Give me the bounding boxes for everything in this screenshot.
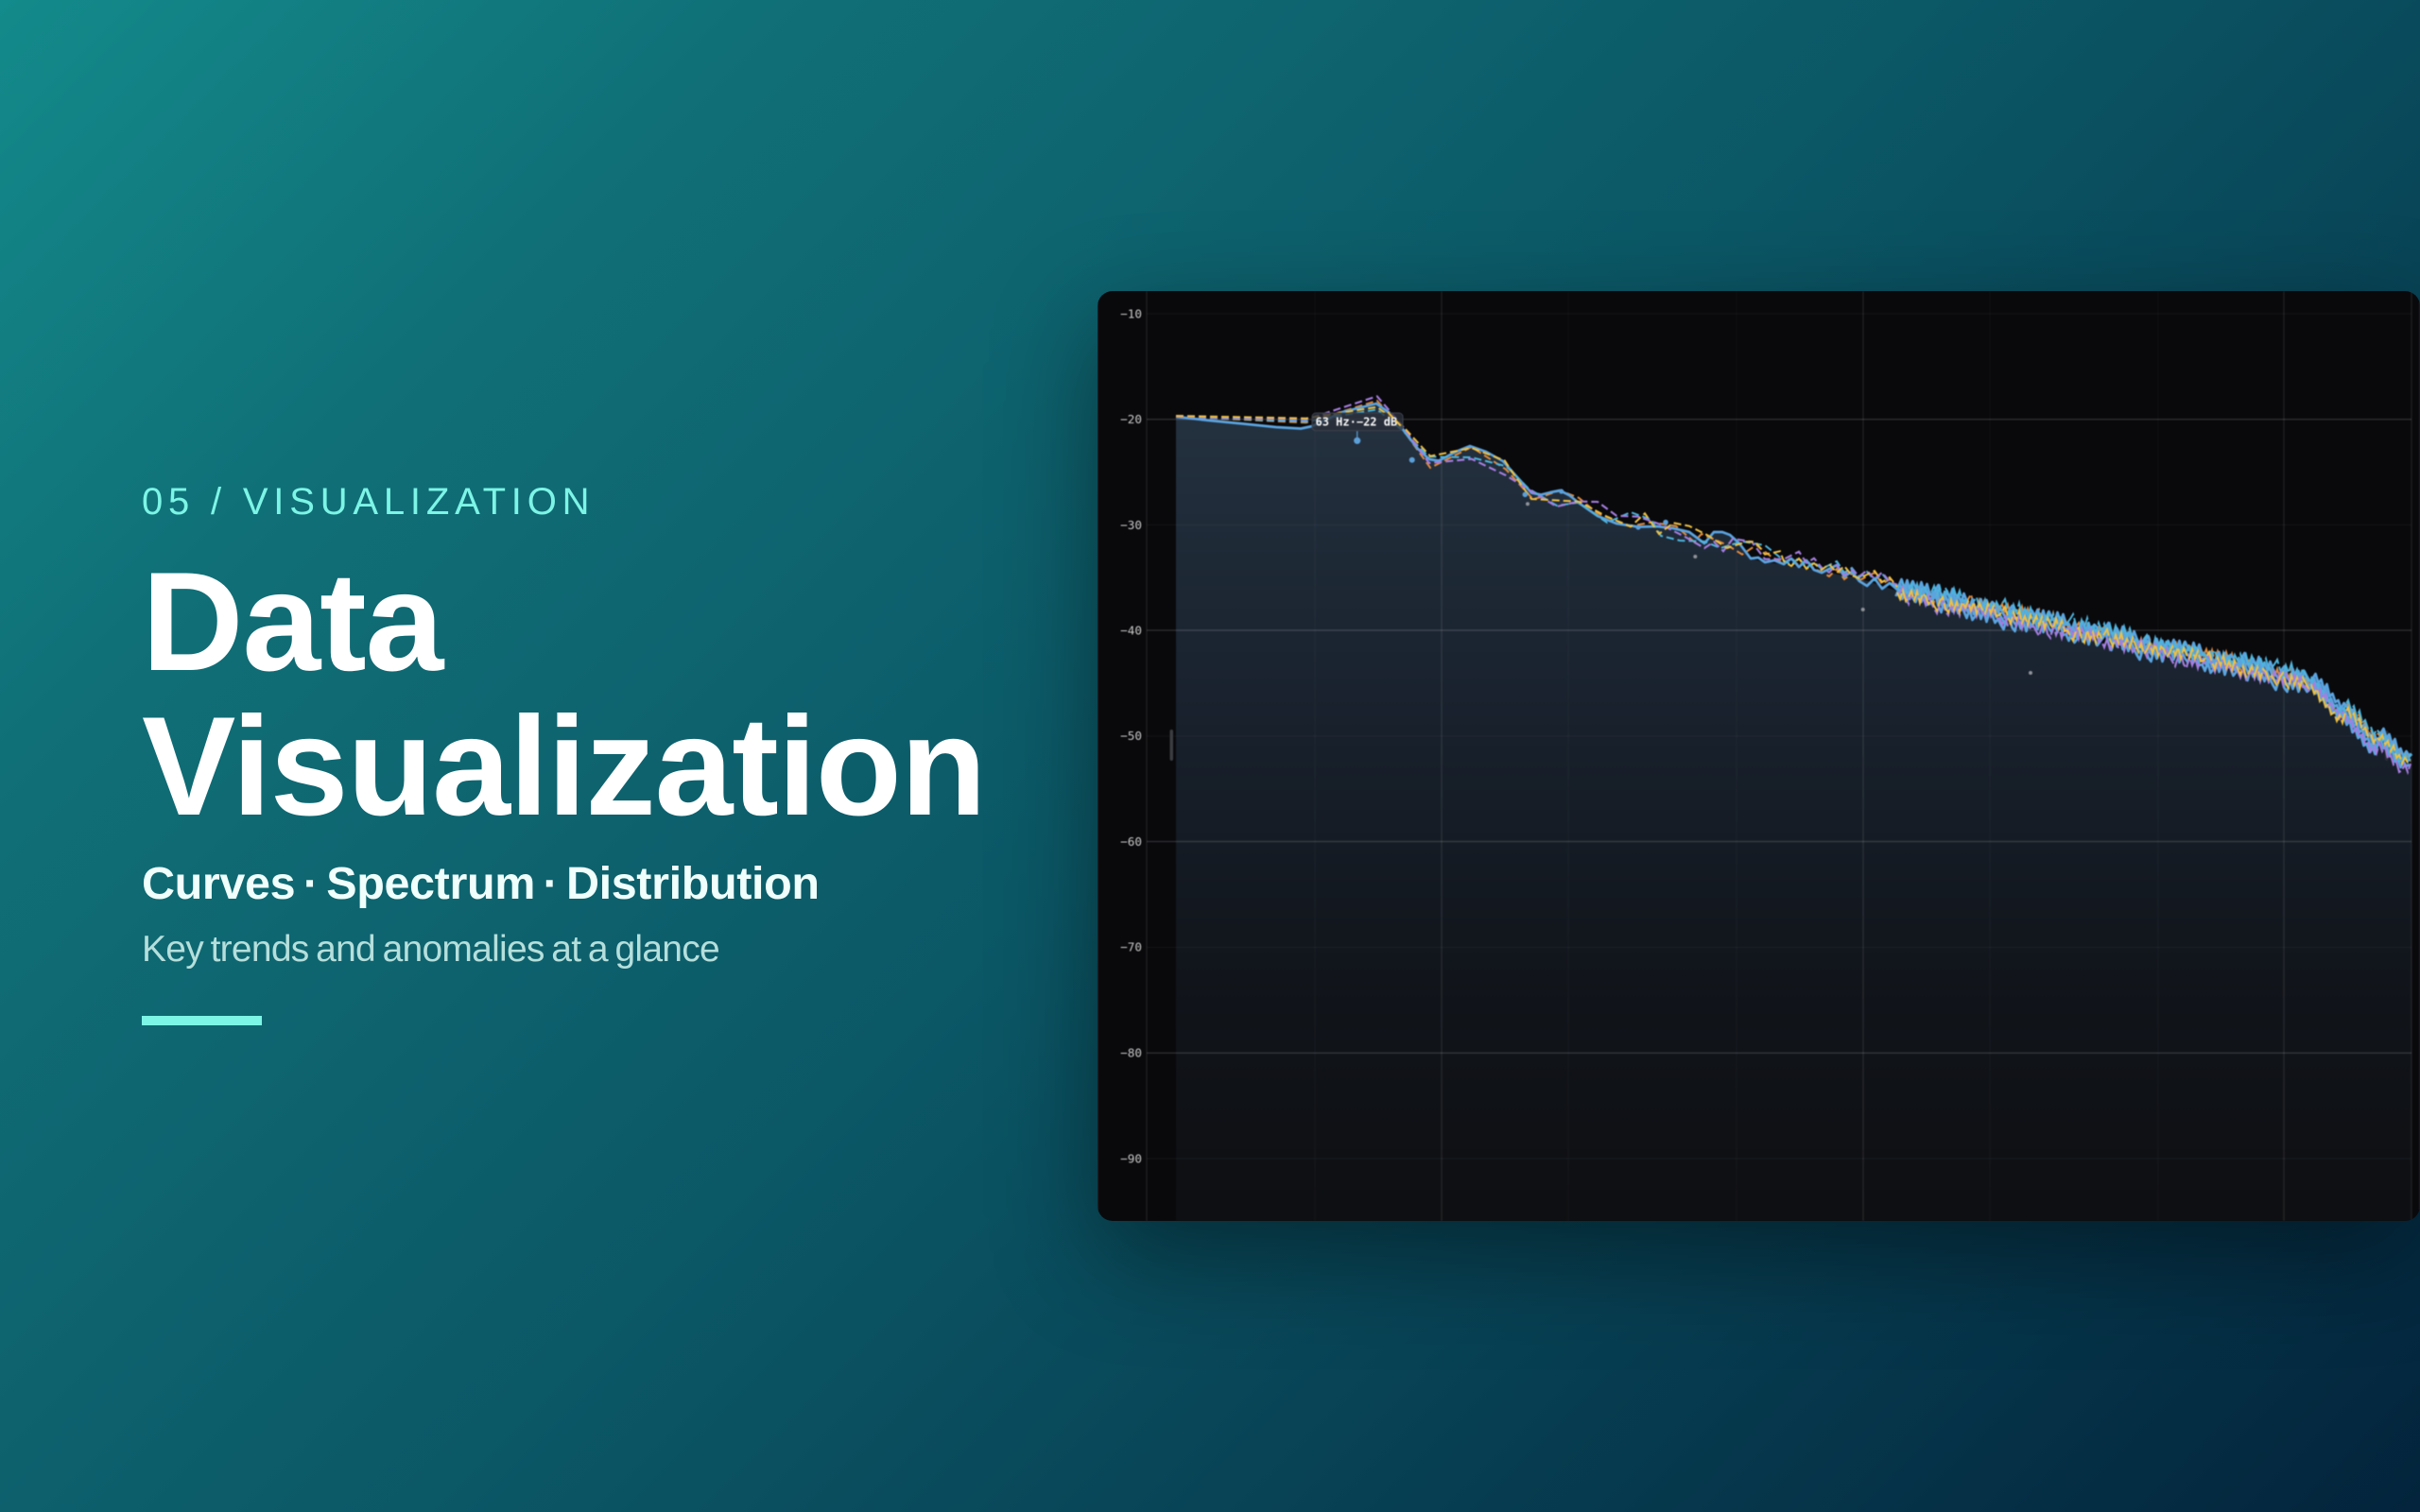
tooltip: 63 Hz −22 dB: 63 Hz·−22 dB bbox=[1316, 416, 1397, 429]
y axis labels bbox=[1120, 306, 1142, 1166]
y axis labels: −40 bbox=[1120, 624, 1142, 637]
y axis labels: −70 bbox=[1120, 939, 1142, 954]
tagline: Key trends and anomalies at a glance bbox=[142, 929, 719, 970]
title: Data bbox=[142, 542, 442, 700]
eyebrow: section label: 05 / VISUALIZATION bbox=[142, 481, 595, 523]
subtitle: Curves · Spectrum · Distribution bbox=[142, 858, 820, 909]
series: light blue dashed line bbox=[1176, 409, 2411, 762]
y axis labels: −80 bbox=[1120, 1045, 1142, 1060]
y axis labels: −50 bbox=[1120, 729, 1142, 743]
anomaly markers: blue dots bbox=[1354, 438, 1668, 530]
anomaly markers: grey dots bbox=[1526, 502, 2032, 675]
accent bar bbox=[142, 1016, 262, 1025]
y axis labels: −90 bbox=[1120, 1151, 1142, 1166]
title bbox=[142, 542, 985, 845]
area fill under the curve bbox=[1176, 404, 2411, 1221]
panel: spectrum chart bbox=[1098, 291, 2420, 1221]
title: Visualization bbox=[142, 687, 985, 845]
y axis labels: −10 bbox=[1120, 306, 1142, 321]
series: orange dashed line bbox=[1176, 401, 2411, 759]
grid lines bbox=[1147, 291, 2411, 1221]
panel edge highlight bbox=[1098, 302, 2420, 1210]
series: solid blue line bbox=[1176, 404, 2412, 767]
tooltip: 63 Hz −22 dB bbox=[1312, 412, 1403, 438]
y axis labels: −20 bbox=[1120, 412, 1142, 426]
y axis labels: −30 bbox=[1120, 518, 1142, 532]
y axis labels: −60 bbox=[1120, 834, 1142, 849]
series: purple dashed line bbox=[1176, 396, 2411, 772]
series: yellow dashed line bbox=[1176, 407, 2411, 764]
range handles bbox=[1170, 730, 2388, 761]
